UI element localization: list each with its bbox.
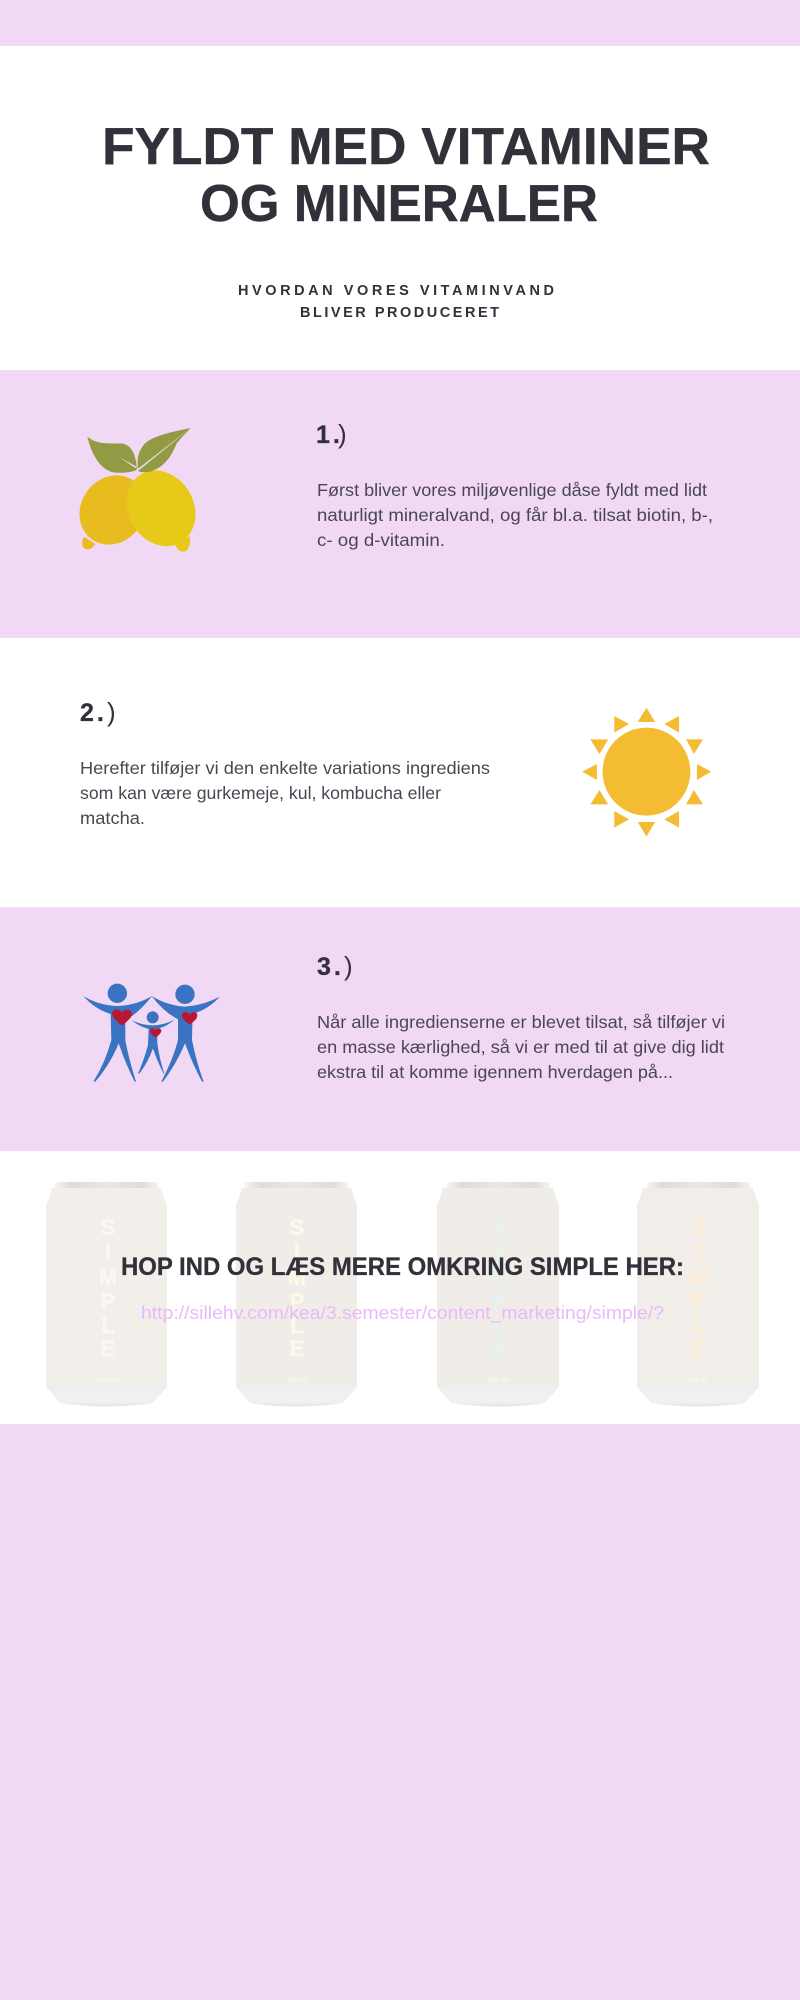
top pink band xyxy=(0,0,800,46)
header panel xyxy=(0,46,800,370)
step 2 text: som kan være gurkemeje, kul, kombucha eller xyxy=(80,783,441,803)
step 2 text xyxy=(80,758,490,828)
can 4: P xyxy=(692,1289,706,1314)
step 3 text: en masse kærlighed, så vi er med til at give dig lidt xyxy=(317,1037,724,1057)
can 4: S xyxy=(692,1215,706,1240)
can 1: P xyxy=(101,1289,115,1314)
step 1 text: naturligt mineralvand, og får bl.a. tilsat biotin, b-, xyxy=(317,505,713,525)
can 3: P xyxy=(492,1289,506,1314)
can 4 xyxy=(637,1182,759,1406)
can 3: S xyxy=(492,1215,506,1240)
can 2: M xyxy=(288,1265,306,1290)
can 3: E xyxy=(492,1336,506,1361)
can 2: S xyxy=(290,1215,304,1240)
title: FYLDT MED VITAMINER xyxy=(102,118,710,176)
panel: call to action with cans xyxy=(0,1151,800,1424)
panel: step 3 xyxy=(0,907,800,1151)
can 3: 330 ml xyxy=(487,1378,509,1385)
can 3 xyxy=(437,1182,559,1406)
step 3 text: ekstra til at komme igennem hverdagen på... xyxy=(317,1062,673,1082)
step 2 text: Herefter tilføjer vi den enkelte variations ingrediens xyxy=(80,758,490,778)
subtitle: HVORDAN VORES VITAMINVAND xyxy=(238,283,554,299)
step 1 text xyxy=(317,480,713,550)
icon: sun xyxy=(582,708,711,837)
subtitle xyxy=(238,283,554,321)
can 2 xyxy=(236,1182,357,1406)
can 2: P xyxy=(290,1289,304,1314)
can 4: I xyxy=(696,1239,702,1264)
can 1 xyxy=(46,1182,167,1406)
can 1: I xyxy=(105,1239,111,1264)
step 1 text: c- og d-vitamin. xyxy=(317,530,445,550)
can 1: 330 ml xyxy=(96,1378,118,1385)
bottom pink panel xyxy=(0,1424,800,2000)
can 2: 330 ml xyxy=(286,1378,308,1385)
step 1 number: ) xyxy=(338,419,347,449)
can 4: 330 ml xyxy=(687,1378,709,1385)
step 2 number: 2. xyxy=(80,699,107,727)
step 3 number: 3. xyxy=(317,953,344,981)
can 1: L xyxy=(101,1313,115,1338)
can 4: M xyxy=(690,1265,708,1290)
step 2 text: matcha. xyxy=(80,808,145,828)
step 1 text: Først bliver vores miljøvenlige dåse fyldt med lidt xyxy=(317,480,707,500)
step 3 text: Når alle ingredienserne er blevet tilsat, så tilføjer vi xyxy=(317,1012,725,1032)
step 3 text xyxy=(317,1012,725,1082)
can 2: L xyxy=(290,1313,304,1338)
can 1: E xyxy=(101,1336,115,1361)
subtitle: BLIVER PRODUCERET xyxy=(300,305,499,321)
panel: step 2 xyxy=(0,638,800,907)
can 2: I xyxy=(294,1239,300,1264)
call to action heading: HOP IND OG LÆS MERE OMKRING SIMPLE HER: xyxy=(121,1253,684,1281)
can 4: L xyxy=(692,1313,706,1338)
title: OG MINERALER xyxy=(200,175,598,233)
icon: lemons with leaves xyxy=(66,428,209,559)
panel: step 1 xyxy=(0,370,800,638)
can 1: M xyxy=(99,1265,117,1290)
step 1 number: 1. xyxy=(316,421,343,449)
title xyxy=(102,118,710,233)
step 3 number: ) xyxy=(344,951,353,981)
link url: http://sillehv.com/kea/3.semester/content_marketing/simple/? xyxy=(141,1303,664,1324)
can 4: E xyxy=(692,1336,706,1361)
can 2: E xyxy=(290,1336,304,1361)
can 3: M xyxy=(490,1265,508,1290)
can 1: S xyxy=(101,1215,115,1240)
can 3: L xyxy=(492,1313,506,1338)
step 2 number: ) xyxy=(107,697,116,727)
can 3: I xyxy=(496,1239,502,1264)
icon: family with hearts xyxy=(83,984,220,1082)
